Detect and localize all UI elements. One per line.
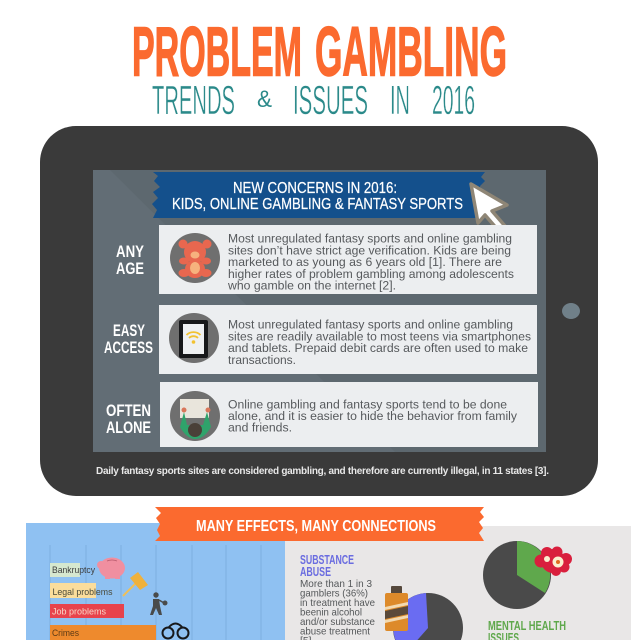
label: often alone: ALONE bbox=[106, 418, 151, 437]
heading: mental health issues: MENTAL HEALTH bbox=[488, 619, 566, 633]
icon: piggy bank bbox=[97, 558, 125, 579]
label: easy access: EASY bbox=[113, 321, 145, 340]
bar: legal problems: Legal problems bbox=[52, 586, 113, 597]
tablet home button bbox=[562, 303, 580, 319]
icon: tablet with wifi bbox=[169, 313, 219, 363]
label: often alone: OFTEN bbox=[106, 401, 151, 420]
heading: substance abuse bbox=[300, 553, 354, 579]
bar: job problems: Job problems bbox=[52, 606, 106, 616]
subtitle: TRENDS bbox=[152, 77, 235, 123]
icon: person alone at a desk bbox=[170, 391, 220, 441]
chart: mental health pie bbox=[483, 541, 551, 609]
heading: substance abuse: ABUSE bbox=[300, 565, 331, 579]
text: substance abuse: More than 1 in 3 bbox=[300, 579, 372, 590]
text: often alone: Online gambling and fantasy sports tend to be done bbox=[228, 397, 507, 411]
icon: gavel bbox=[123, 572, 148, 596]
card: easy access bbox=[159, 305, 537, 374]
card: any age bbox=[159, 225, 537, 294]
icon: flower bbox=[534, 546, 572, 576]
heading: mental health issues bbox=[488, 619, 566, 640]
text: often alone: and friends. bbox=[228, 421, 292, 435]
text: easy access: Most unregulated fantasy sports and online gambling bbox=[228, 318, 513, 332]
icon: walking man bbox=[150, 592, 168, 615]
infographic canvas: 2016 bbox=[432, 77, 475, 123]
text: easy access: sites are readily available to most teens via smartphones bbox=[228, 329, 531, 343]
bar: crimes bbox=[50, 625, 156, 640]
heading ribbon: new concerns bbox=[152, 172, 485, 218]
icon: cursor arrow bbox=[471, 184, 507, 230]
label: often alone bbox=[106, 401, 151, 437]
text: substance abuse: abuse treatment bbox=[300, 626, 370, 638]
text: substance abuse bbox=[300, 579, 375, 640]
ribbon heading: many effects: MANY EFFECTS, MANY CONNECTIONS bbox=[196, 518, 436, 535]
heading: substance abuse: SUBSTANCE bbox=[300, 553, 354, 567]
label: easy access bbox=[104, 321, 153, 357]
bar: crimes: Crimes bbox=[52, 627, 79, 638]
text: any age bbox=[227, 232, 514, 293]
panel: tablet bbox=[40, 126, 598, 496]
label: any age bbox=[116, 242, 145, 278]
subtitle bbox=[152, 77, 475, 123]
icon: whisky bottle bbox=[385, 586, 408, 631]
text: substance abuse: and/or substance bbox=[300, 617, 375, 628]
text: any age: higher rates of problem gambling among adolescents bbox=[228, 267, 514, 281]
text: easy access bbox=[228, 318, 531, 367]
text: any age: marketed to as young as 6 years old [1]. There are bbox=[228, 255, 502, 269]
label: any age: AGE bbox=[116, 259, 144, 278]
heading ribbon: new concerns: KIDS, ONLINE GAMBLING & FANTASY SPORTS bbox=[172, 196, 463, 213]
chart: substance abuse pie bbox=[393, 593, 463, 640]
footnote: Daily fantasy sports sites are considered gambling, and therefore are currently illegal, in 11 states [3]. bbox=[96, 466, 549, 477]
heading ribbon: new concerns: NEW CONCERNS IN 2016: bbox=[233, 180, 397, 197]
text: easy access: and tablets. Prepaid debit cards are often used to make bbox=[228, 341, 528, 355]
icon: handcuffs bbox=[162, 624, 188, 638]
text: substance abuse: gamblers (36%) bbox=[300, 588, 368, 600]
label: easy access: ACCESS bbox=[104, 338, 153, 357]
bar: bankruptcy: Bankruptcy bbox=[52, 564, 95, 575]
subtitle: ISSUES bbox=[293, 77, 368, 123]
text: often alone: alone, and it is easier to hide the behavior from family bbox=[228, 409, 518, 423]
text: any age: sites don’t have strict age verification. Kids are being bbox=[228, 243, 511, 257]
text: substance abuse: in treatment have bbox=[300, 598, 375, 609]
text: any age: Most unregulated fantasy sports and online gambling bbox=[228, 232, 512, 246]
title: PROBLEM bbox=[132, 12, 302, 90]
icon: teddy bear bbox=[170, 233, 220, 283]
subtitle: & bbox=[257, 86, 272, 113]
subtitle: IN bbox=[390, 77, 410, 123]
panel: connections bbox=[282, 526, 631, 640]
label: any age: ANY bbox=[116, 242, 145, 261]
text: any age: who gamble on the internet [2]. bbox=[227, 279, 396, 293]
text: easy access: transactions. bbox=[228, 353, 296, 367]
text: often alone bbox=[228, 397, 518, 435]
chart gridlines bbox=[50, 545, 261, 640]
ribbon heading: many effects bbox=[155, 507, 484, 541]
bar: job problems bbox=[50, 604, 124, 618]
panel: effects chart bbox=[26, 507, 631, 640]
card: often alone bbox=[160, 382, 538, 447]
bar: legal problems bbox=[50, 583, 113, 598]
tablet screen bbox=[93, 170, 546, 452]
text: substance abuse: beenin alcohol bbox=[300, 608, 362, 618]
